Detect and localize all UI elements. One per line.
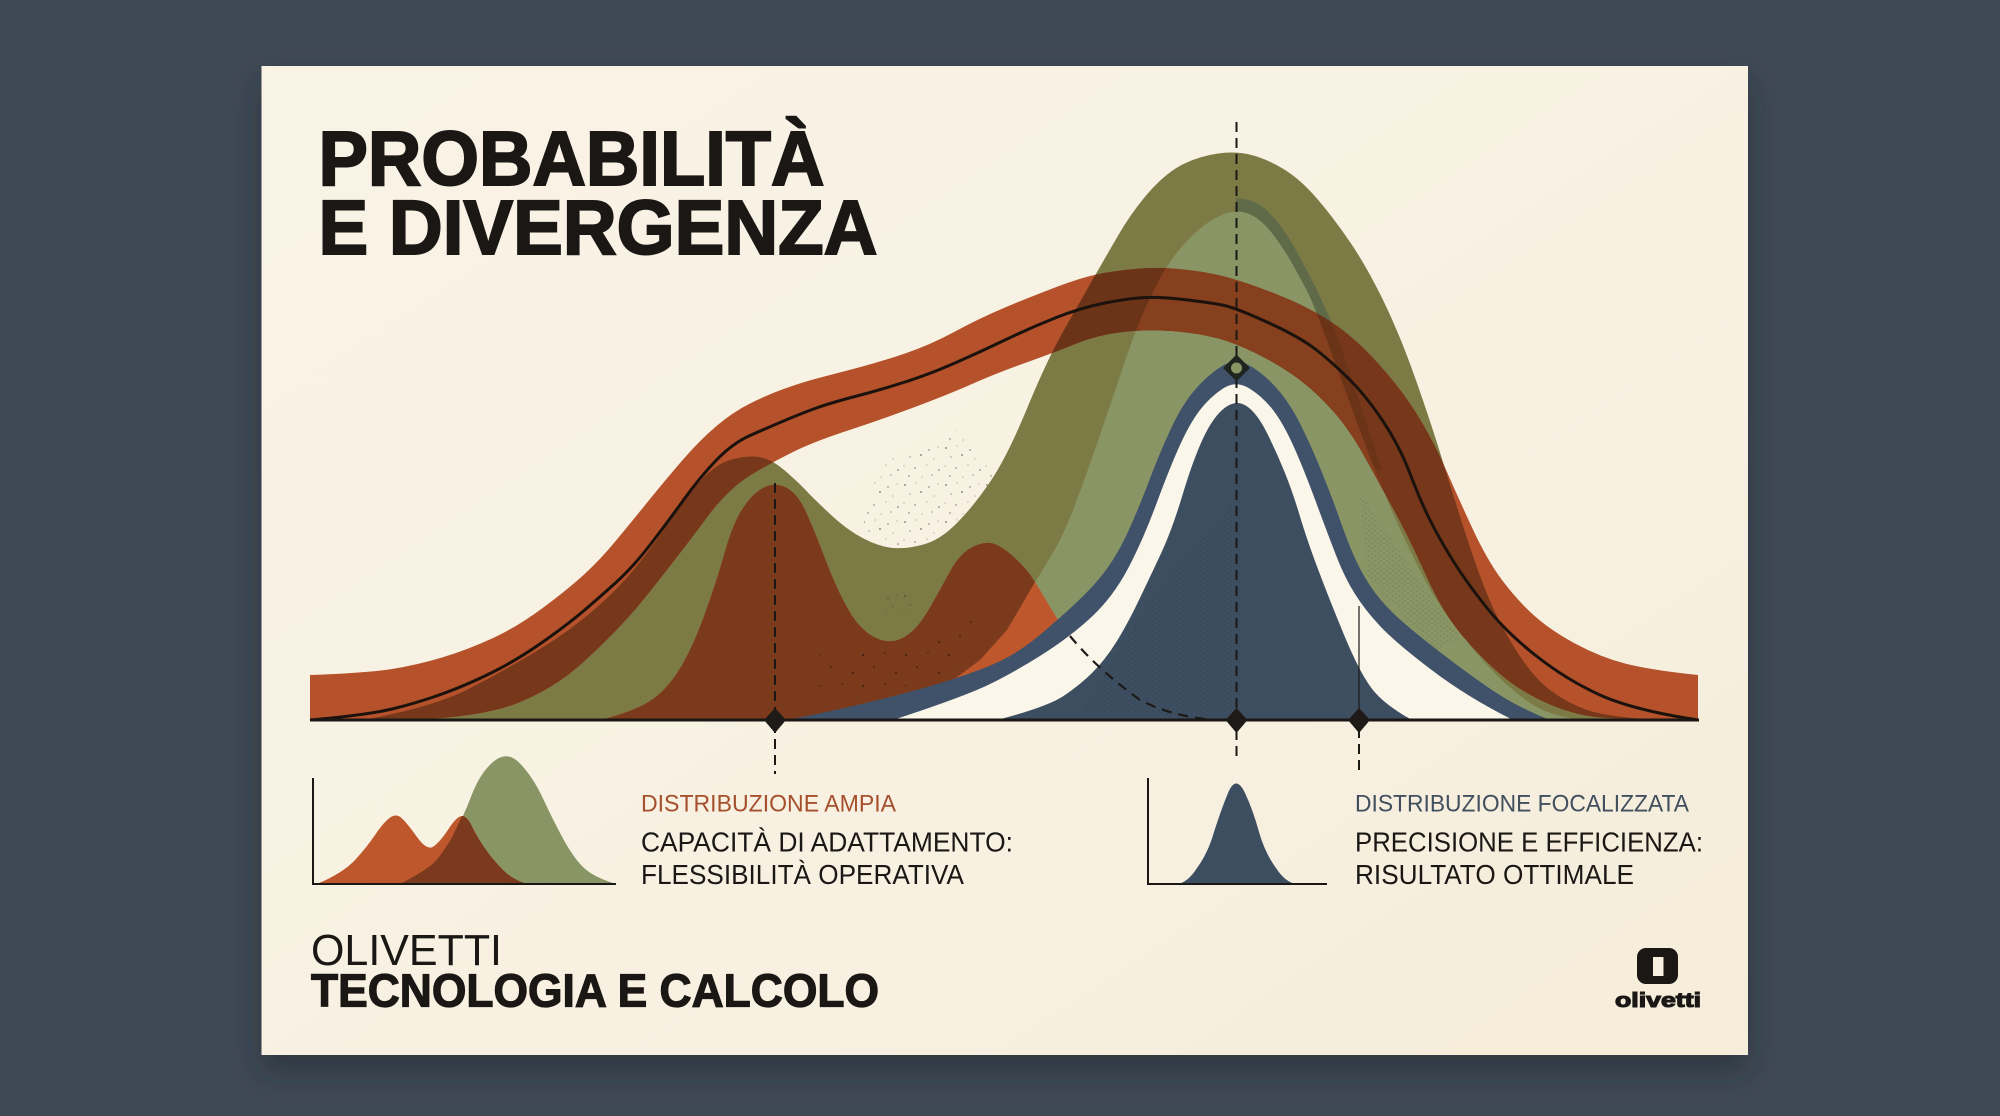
legend text: broad distribution: FLESSIBILITÀ OPERATIVA [641, 859, 965, 890]
title [318, 115, 878, 271]
halftone on light olive [1359, 491, 1460, 650]
speckle on olive valley [885, 588, 912, 615]
marker diamond left [764, 708, 786, 733]
legend text: broad distribution: DISTRIBUZIONE AMPIA [641, 790, 897, 818]
legend text: focused distribution [1355, 790, 1703, 890]
shadow band inside olive peak [1236, 198, 1382, 470]
black mean line [310, 297, 1698, 720]
legend mini chart: focused distribution [1148, 778, 1327, 884]
halftone on inner navy [1080, 505, 1233, 716]
dashed guide right [1358, 728, 1360, 776]
logo: olivetti [1615, 948, 1701, 1012]
light olive distribution [953, 211, 1585, 720]
white gap bell [893, 384, 1513, 720]
legend text: broad distribution: CAPACITÀ DI ADATTAMENTO: [641, 826, 1013, 858]
legend text: focused distribution: RISULTATO OTTIMALE [1355, 859, 1634, 890]
legend text: focused distribution: DISTRIBUZIONE FOCALIZZATA [1355, 790, 1690, 818]
broad olive distribution [363, 153, 1660, 720]
marker diamond right [1348, 708, 1370, 733]
marker diamond centre [1226, 708, 1248, 733]
dashed guide left [774, 483, 776, 774]
thin marker line [1358, 606, 1360, 720]
rust humps, orange base [600, 485, 1058, 720]
footer heading: TECNOLOGIA E CALCOLO [311, 964, 879, 1016]
title: E DIVERGENZA [318, 185, 878, 271]
baseline axis [310, 718, 1699, 722]
outer navy bell [787, 362, 1550, 720]
dashed guide centre [1236, 122, 1238, 760]
peak marker [1224, 356, 1248, 380]
logo: olivetti: olivetti [1615, 990, 1701, 1012]
speckle texture above valley [862, 430, 995, 552]
main distribution chart [310, 122, 1699, 776]
title: PROBABILITÀ [318, 115, 824, 202]
legend mini chart: broad distribution [313, 756, 616, 884]
footer heading [311, 927, 879, 1016]
legend text: focused distribution: PRECISIONE E EFFICIENZA: [1355, 826, 1703, 858]
rust humps over olive [600, 485, 1035, 720]
legend text: broad distribution [641, 790, 1013, 890]
footer heading: OLIVETTI [311, 927, 502, 975]
paper panel [262, 66, 1748, 1055]
inner navy bell [997, 403, 1412, 720]
dashed tail curve [1070, 636, 1228, 720]
speckle on rust humps [820, 580, 990, 697]
rust band [310, 268, 1698, 720]
